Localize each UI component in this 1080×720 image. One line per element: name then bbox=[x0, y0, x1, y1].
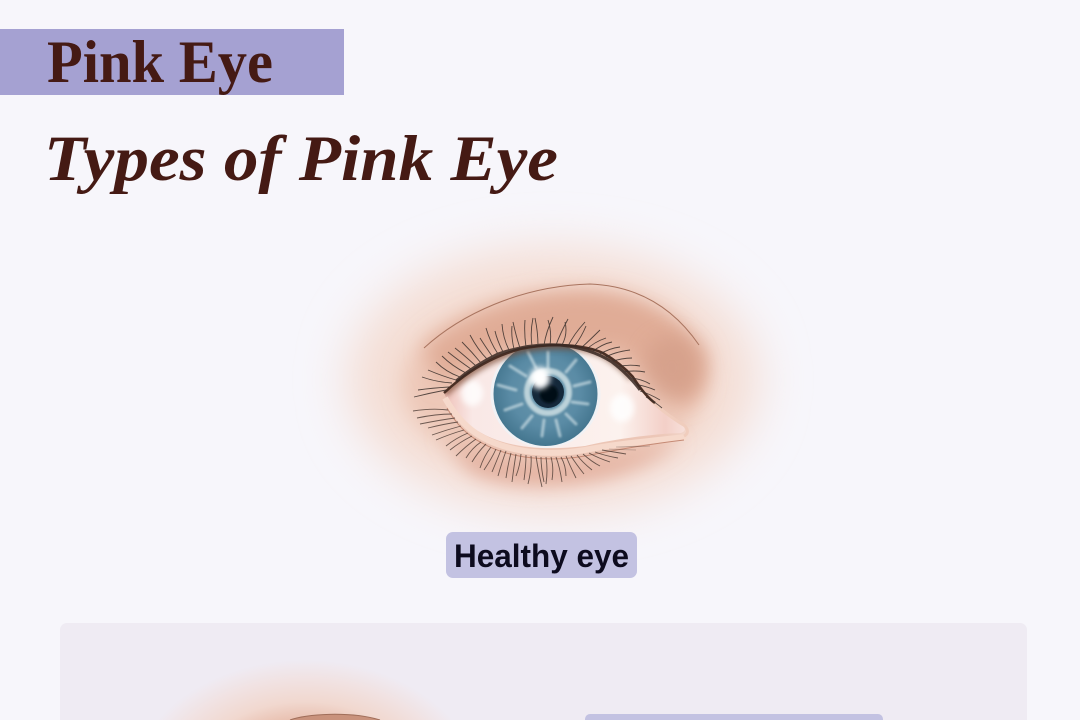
header band bbox=[0, 29, 344, 95]
brow crease bbox=[424, 284, 699, 348]
heading: Pink Eye: Pink Eye bbox=[47, 29, 273, 95]
illustration: healthy eye bbox=[348, 248, 758, 512]
lower lashes bbox=[413, 409, 650, 487]
panel: pink eye type bbox=[60, 623, 1027, 720]
lower lid rim bbox=[445, 398, 686, 453]
eyeball bbox=[444, 346, 685, 448]
upper lashes bbox=[414, 317, 662, 408]
label: Healthy eye: Healthy eye bbox=[454, 538, 629, 574]
upper lid line bbox=[444, 345, 655, 403]
label: type name bbox=[585, 714, 883, 720]
illustration: affected eye top bbox=[130, 655, 480, 720]
iris bbox=[490, 352, 600, 448]
title: Types of Pink Eye bbox=[44, 123, 558, 195]
